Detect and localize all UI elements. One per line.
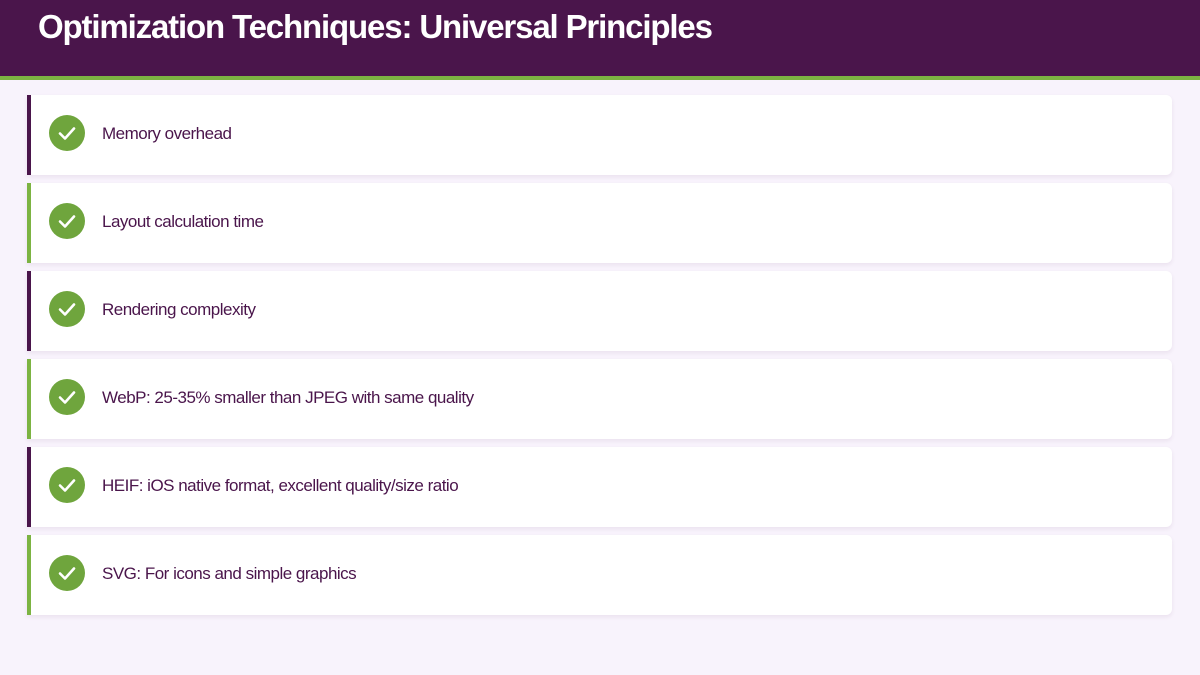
title: Optimization Techniques: Universal Principles bbox=[38, 8, 712, 45]
icon: check bbox=[49, 467, 85, 503]
card: heif bbox=[27, 447, 1172, 527]
text: SVG: For icons and simple graphics bbox=[102, 564, 356, 583]
text: WebP: 25-35% smaller than JPEG with same quality bbox=[102, 388, 474, 407]
card: webp bbox=[27, 359, 1172, 439]
icon: check bbox=[49, 379, 85, 415]
icon: check bbox=[49, 203, 85, 239]
card: memory overhead bbox=[27, 95, 1172, 175]
text: Memory overhead bbox=[102, 124, 232, 143]
text: Layout calculation time bbox=[102, 212, 263, 231]
icon: check bbox=[49, 291, 85, 327]
card: layout calculation bbox=[27, 183, 1172, 263]
icon: check bbox=[49, 115, 85, 151]
card: svg bbox=[27, 535, 1172, 615]
card: rendering bbox=[27, 271, 1172, 351]
header bbox=[0, 0, 1200, 80]
text: Rendering complexity bbox=[102, 300, 255, 319]
text: HEIF: iOS native format, excellent quality/size ratio bbox=[102, 476, 458, 495]
icon: check bbox=[49, 555, 85, 591]
